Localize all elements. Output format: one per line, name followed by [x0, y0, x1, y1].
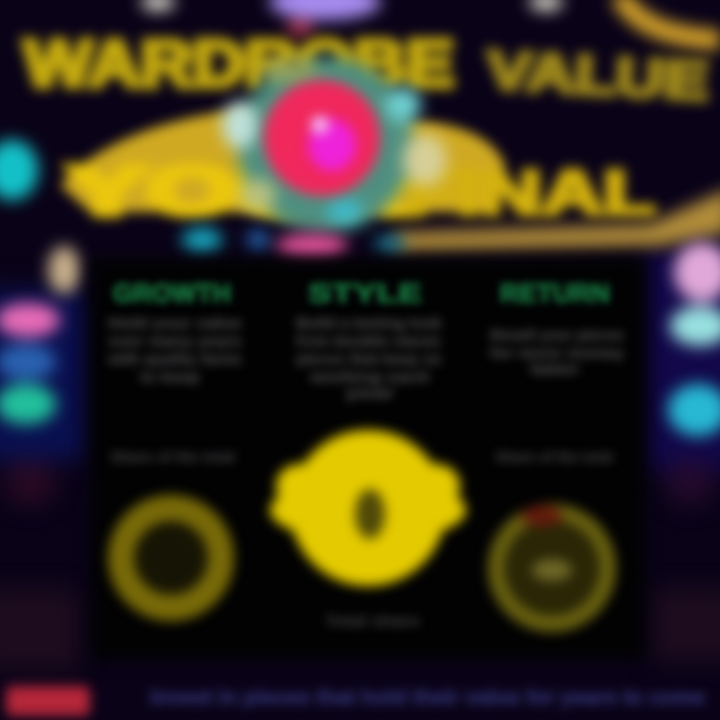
column two text: [296, 315, 443, 402]
chart hole: [355, 489, 385, 539]
column two text: from durable classic: [296, 333, 442, 350]
column two heading: STYLE: [308, 278, 422, 308]
column one text: [107, 315, 242, 386]
column three text: later: [530, 361, 580, 378]
banner right text: FINAL: [405, 159, 655, 228]
column three text: [490, 327, 625, 378]
medallion magenta heart: [308, 119, 356, 171]
medallion ring: [222, 57, 447, 233]
column two text: working each: [309, 369, 430, 386]
column two gold flower chart: [270, 430, 466, 586]
teal light: [182, 227, 222, 253]
black panel: [90, 258, 646, 660]
column two caption: Total share: [325, 613, 420, 630]
right side lights: [668, 242, 720, 436]
top lights: [141, 0, 563, 36]
column three caption: Share of the total: [495, 449, 613, 466]
medallion highlight: [311, 116, 329, 134]
column one text: over many years: [108, 333, 242, 350]
top purple light: [269, 0, 381, 20]
main title line one: WARDROBE: [24, 26, 454, 100]
column three donut: [496, 506, 608, 624]
column three heading: RETURN: [500, 278, 610, 308]
column one text: Hold your value: [108, 315, 242, 332]
main title: [24, 26, 710, 112]
footer: [6, 686, 705, 716]
column two text: Build a lasting look: [296, 315, 443, 332]
medallion red disc: [264, 80, 380, 196]
column three text: for more money: [490, 345, 625, 362]
lights under banner: [182, 227, 406, 258]
background glow: [0, 250, 720, 670]
left cyan light: [0, 140, 38, 200]
banner arch: [60, 112, 505, 212]
column two text: year: [345, 385, 395, 402]
column one: [107, 278, 242, 608]
column two: [270, 278, 466, 630]
left side lights: [0, 140, 80, 424]
top right gold arc: [620, 0, 720, 40]
pink light: [276, 234, 348, 258]
column two text: pieces that keep on: [296, 351, 442, 368]
footer text: Invest in pieces that hold their value for years to come: [150, 687, 705, 709]
right pink light: [674, 242, 720, 302]
column one caption: Share of the total: [110, 449, 235, 466]
right cyan light: [670, 306, 720, 346]
left blue light: [0, 344, 56, 380]
column three: [490, 278, 625, 624]
blue light: [247, 229, 269, 251]
column one donut: [121, 508, 221, 608]
main title line two: VALUE: [485, 40, 710, 112]
gold banner: [60, 112, 655, 229]
left cream light: [48, 246, 80, 294]
left pink light: [0, 303, 60, 337]
red segment: [522, 506, 562, 526]
cyan light: [374, 236, 406, 252]
gold underline: [395, 188, 720, 252]
donut center: [532, 559, 572, 581]
column one heading: GROWTH: [113, 278, 231, 308]
column three text: Resell your pieces: [490, 327, 624, 344]
right blue light: [668, 384, 720, 436]
banner text: YOUR: [68, 153, 408, 229]
left green light: [0, 384, 56, 424]
column one text: with quality items: [107, 351, 242, 368]
footer red logo: [6, 686, 90, 716]
central medallion: [222, 57, 447, 233]
column one text: to keep: [140, 369, 200, 386]
